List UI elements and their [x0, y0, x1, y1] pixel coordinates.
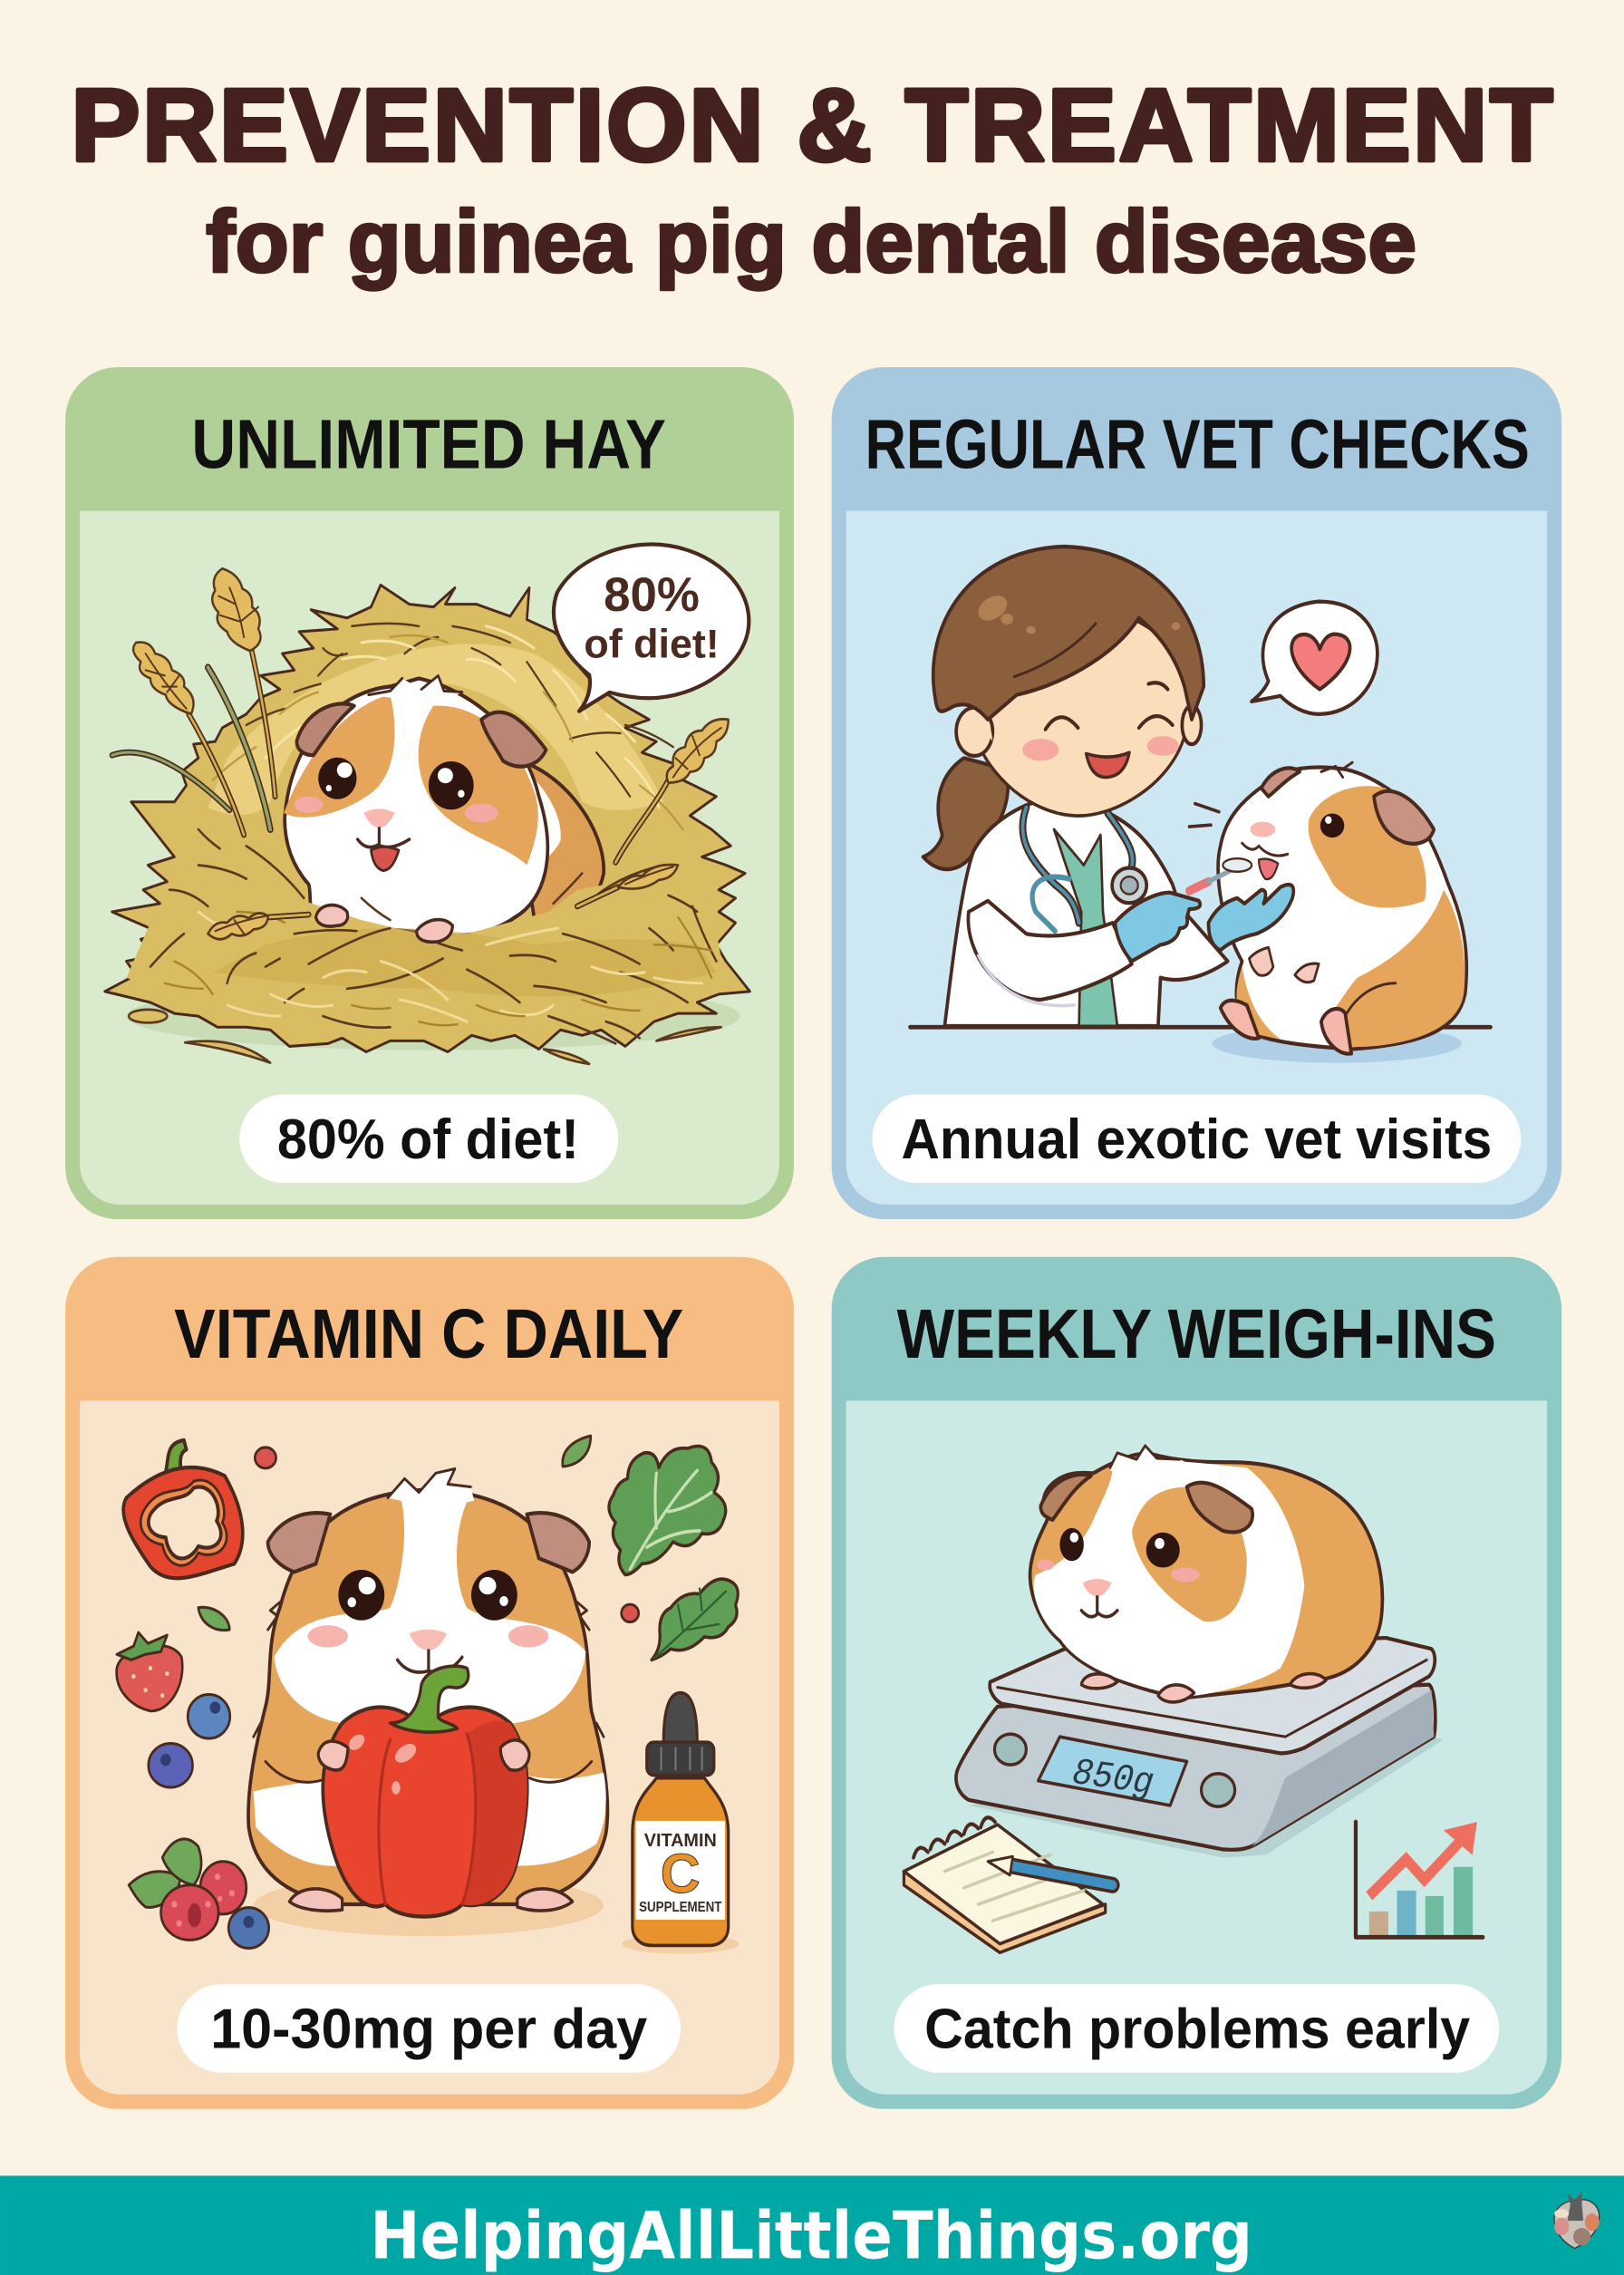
title line 1: PREVENTION & TREATMENT	[71, 68, 1553, 183]
bell pepper	[323, 1666, 527, 1917]
caption pill: 10-30mg per day	[210, 1998, 648, 2061]
hay pile	[105, 585, 750, 1052]
illustration: vet and guinea pig	[910, 547, 1491, 1063]
guinea pig	[248, 1468, 607, 1911]
cheeks	[295, 797, 323, 813]
ears	[296, 703, 354, 755]
heart bubble	[1252, 602, 1378, 714]
wheat stalks	[112, 648, 669, 917]
caption pill	[177, 1984, 681, 2073]
ears	[268, 1513, 330, 1572]
front hay roll	[126, 829, 726, 1043]
heading: UNLIMITED HAY	[191, 405, 666, 483]
sleeve	[968, 901, 1132, 1000]
cheeks	[308, 1625, 348, 1647]
heading: WEEKLY WEIGH-INS	[897, 1295, 1496, 1373]
caption pill: Annual exotic vet visits	[901, 1108, 1492, 1171]
guinea pig patient	[1218, 762, 1466, 1054]
dental tool	[1189, 858, 1252, 891]
gloves	[1115, 885, 1293, 962]
arms and side fur	[254, 1602, 604, 1782]
illustration: guinea pig on scale	[904, 1446, 1483, 1952]
title line 2: for guinea pig dental disease	[206, 193, 1416, 290]
coat	[944, 802, 1228, 1026]
pen	[988, 1856, 1113, 1885]
speech bubble: 80%	[604, 568, 700, 622]
pepper ring	[123, 1440, 243, 1578]
mouth	[1087, 752, 1129, 778]
website: HelpingAllLittleThings.org	[370, 2198, 1252, 2274]
logo: heart of small animals	[1554, 2192, 1600, 2249]
growth chart	[1356, 1822, 1483, 1937]
blueberries	[149, 1695, 269, 1948]
ears	[1374, 791, 1434, 844]
caption pill: 80% of diet!	[277, 1108, 579, 1171]
scrubs	[1054, 829, 1117, 1026]
caption pill: Catch problems early	[924, 1998, 1470, 2061]
speech bubble	[554, 545, 749, 712]
caption pill	[894, 1984, 1499, 2073]
caption pill	[872, 1094, 1521, 1183]
nose and mouth	[410, 1630, 447, 1651]
footer bar	[0, 2175, 1624, 2275]
ponytail	[923, 758, 1008, 869]
stethoscope	[1022, 808, 1133, 923]
eyes	[1059, 1528, 1084, 1561]
body	[510, 758, 604, 919]
kitchen scale	[956, 1638, 1444, 1857]
feet	[289, 1889, 343, 1911]
cheeks	[1037, 1559, 1054, 1571]
guinea pig	[1030, 1446, 1382, 1702]
wheat ears	[133, 568, 729, 939]
caption pill	[239, 1094, 618, 1183]
title	[71, 68, 1553, 290]
eyes	[338, 1570, 384, 1621]
paws	[1081, 1674, 1326, 1702]
vitamin bottle	[633, 1693, 729, 1945]
heading: VITAMIN C DAILY	[174, 1295, 683, 1373]
eyes	[1046, 682, 1173, 730]
ears	[1187, 1483, 1252, 1533]
lettuce leaves	[609, 1447, 738, 1660]
speech bubble: of diet!	[584, 620, 720, 666]
head	[969, 616, 1191, 816]
vet	[923, 547, 1228, 1026]
forelock	[388, 1468, 474, 1509]
bottle label text: C	[661, 1843, 701, 1904]
bottle label text: SUPPLEMENT	[639, 1900, 722, 1915]
illustration: guinea pig in hay	[105, 568, 750, 1064]
nose and mouth	[1083, 1579, 1112, 1597]
scale display reading: 850g	[1069, 1751, 1156, 1805]
paws	[316, 905, 452, 942]
panel: unlimited hay	[65, 367, 794, 1219]
paws and feet	[1249, 947, 1273, 975]
loose hay bits	[129, 1010, 721, 1064]
strawberry	[117, 1632, 182, 1711]
paws	[318, 1740, 529, 1770]
forelock	[1110, 1446, 1204, 1484]
panel: regular vet checks	[832, 367, 1561, 1219]
panel: vitamin c daily	[65, 1257, 794, 2109]
bottle label text	[639, 1831, 722, 1915]
dots and small leaves	[198, 1436, 639, 1631]
notepad	[904, 1817, 1106, 1952]
head	[285, 678, 547, 935]
nose and mouth	[363, 808, 395, 828]
mouth	[1242, 843, 1288, 856]
guinea pig	[284, 675, 604, 935]
hair	[933, 547, 1204, 720]
panel: weekly weigh-ins	[832, 1257, 1561, 2109]
eyes	[318, 758, 357, 799]
illustration: guinea pig with pepper	[117, 1436, 739, 1954]
bottle label text: VITAMIN	[644, 1831, 717, 1851]
raspberries	[129, 1839, 246, 1940]
